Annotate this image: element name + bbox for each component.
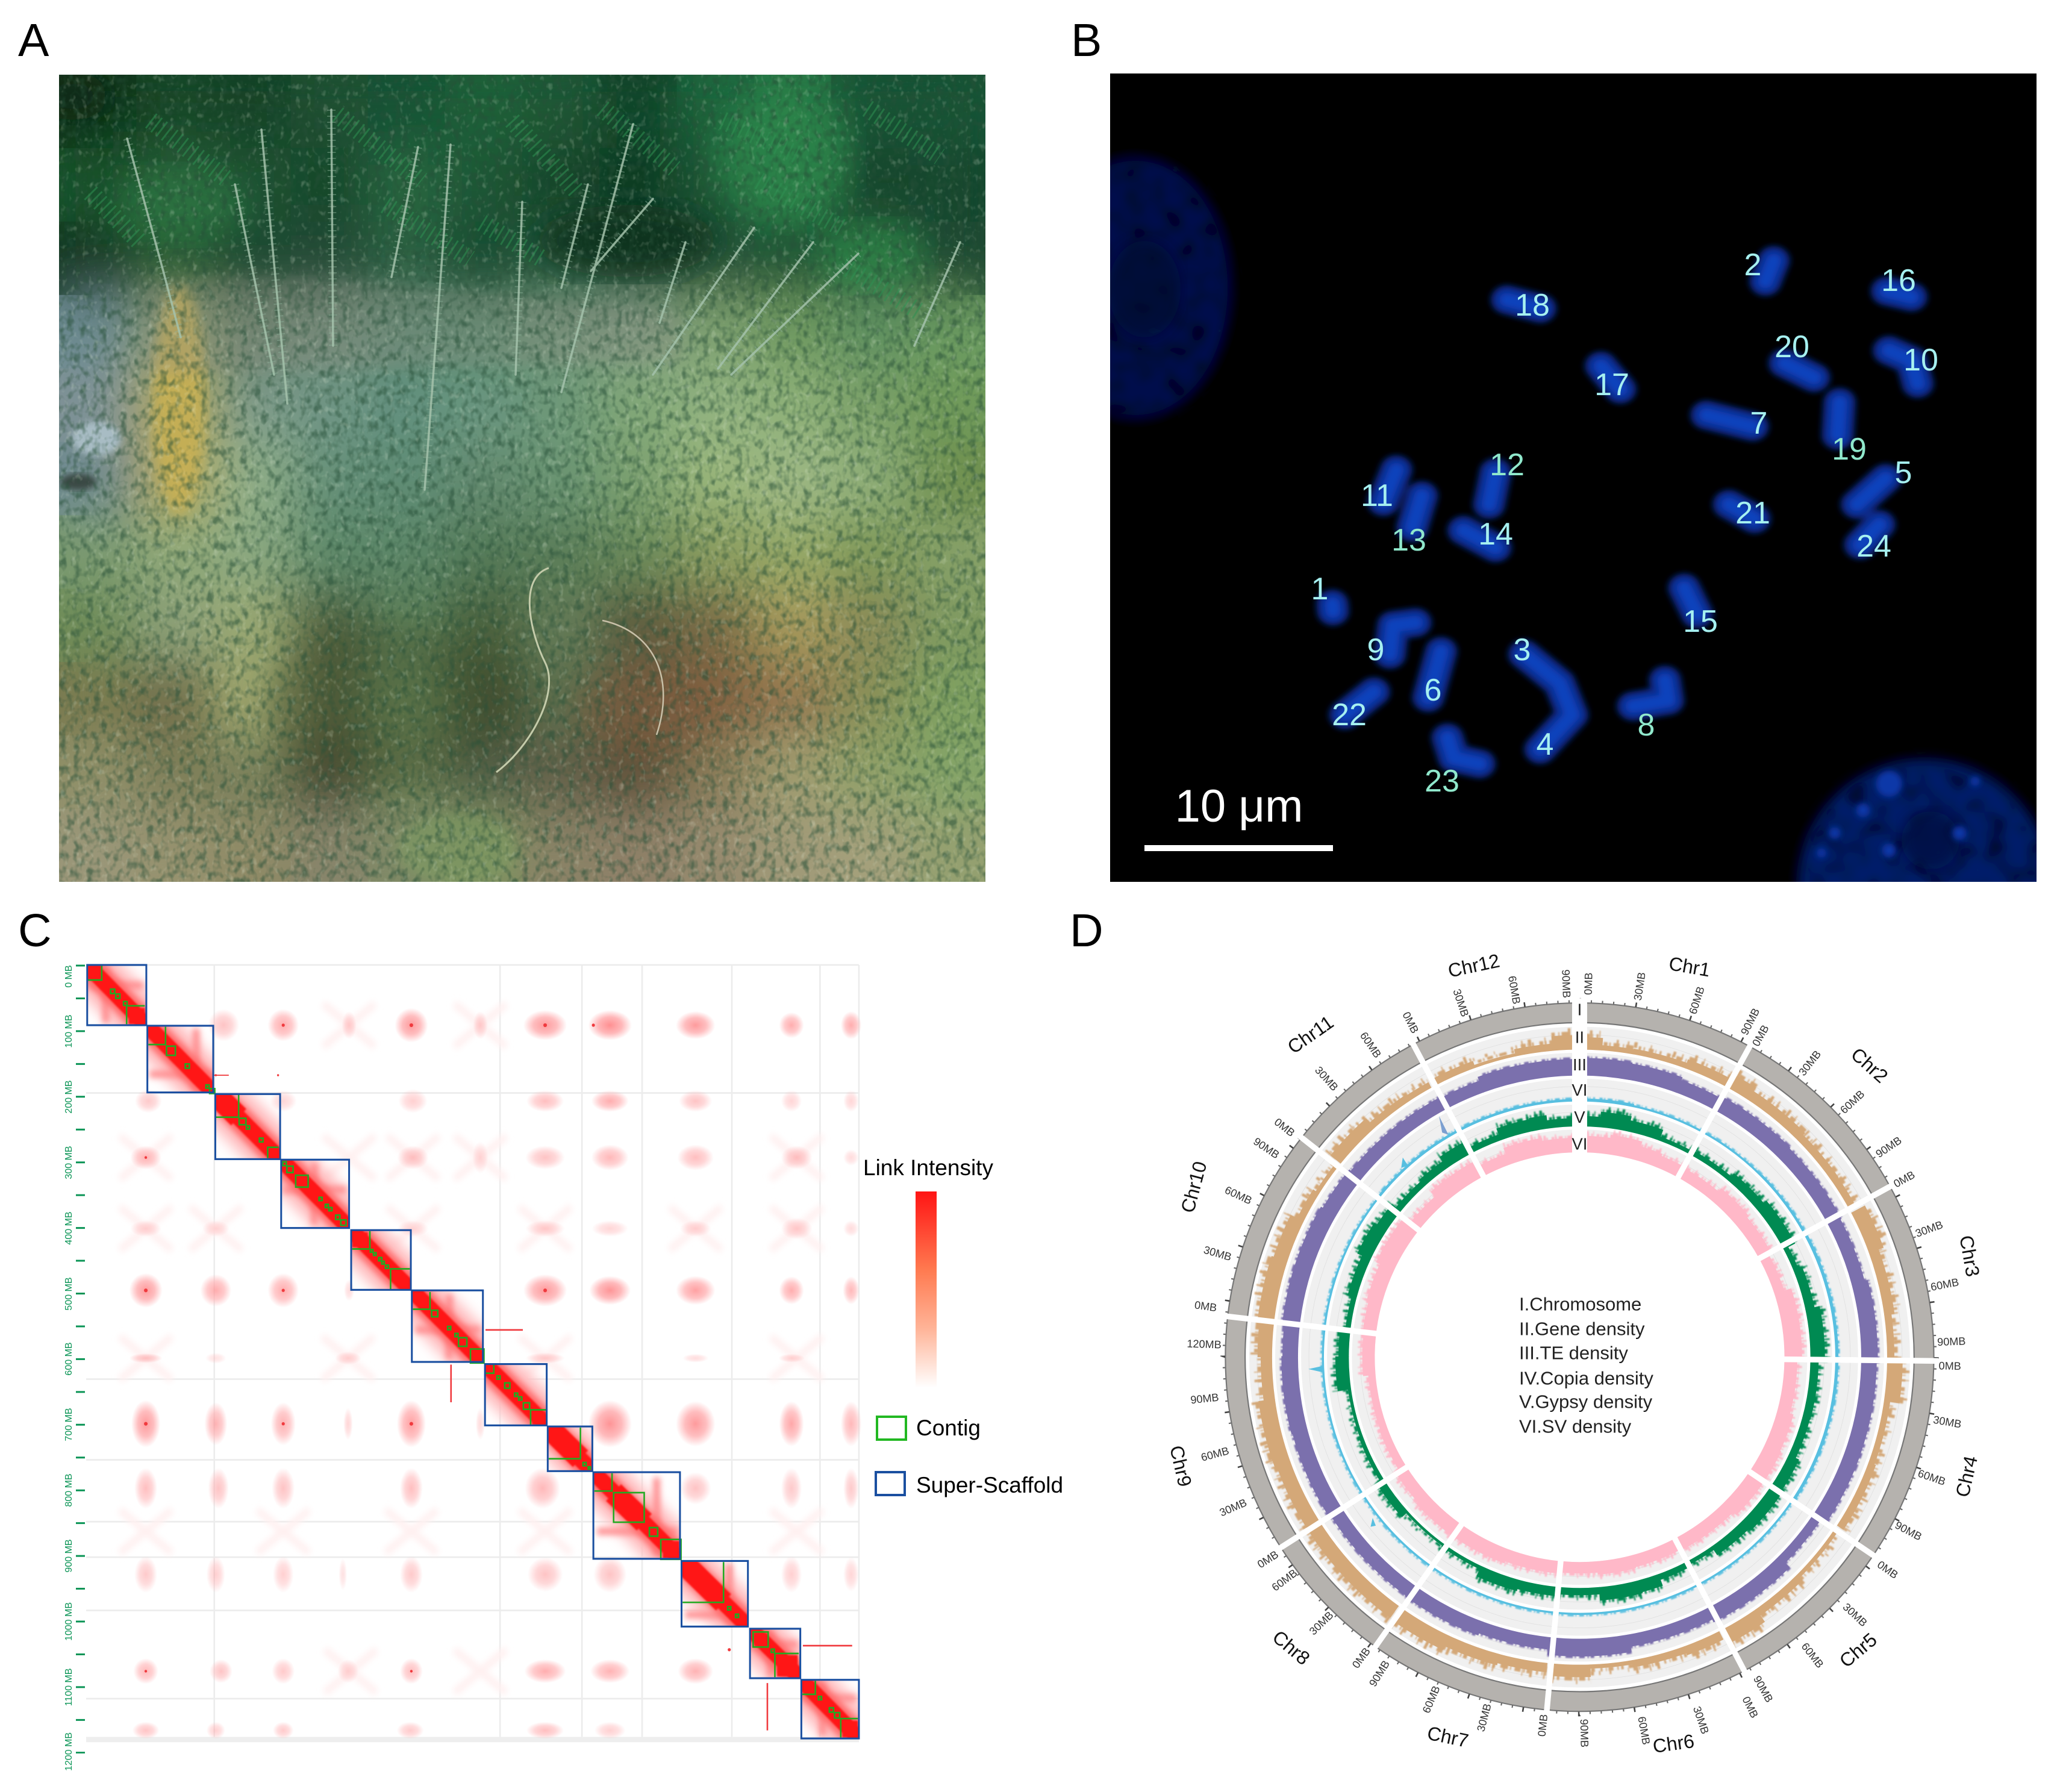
megabase tick labels: 90MB [1251,1135,1282,1161]
panel label C: C [18,905,52,957]
megabase tick labels: 60MB [1420,1684,1443,1715]
megabase tick labels: 90MB [1559,969,1573,998]
panel D: centre track legend: I.Chromosome [1519,1294,1641,1314]
megabase tick labels: 60MB [1270,1567,1299,1594]
chromosome names: Chr12 [1446,949,1502,982]
panel B: chromosome numbers: 22 [1332,698,1367,732]
track roman numerals: III [1573,1055,1587,1074]
panel D: centre track legend: IV.Copia density [1519,1367,1653,1389]
off-diagonal interaction blobs [130,1008,861,1739]
panel B: chromosome numbers: 4 [1537,727,1553,762]
megabase tick labels: 30MB [1932,1414,1962,1431]
super-scaffold boxes [87,965,859,1738]
megabase tick labels: 90MB [1578,1719,1591,1747]
panel D: centre track legend: III.TE density [1519,1342,1628,1364]
megabase tick labels: 60MB [1223,1184,1254,1207]
megabase tick labels: 30MB [1632,972,1648,1001]
megabase tick labels: 90MB [1738,1006,1762,1037]
panel B: chromosome numbers: 8 [1638,708,1655,743]
megabase tick labels [1187,969,1966,1747]
pale halo around the diagonal [87,965,859,1738]
panel B: chromosome numbers: 2 [1744,248,1761,283]
panel B: chromosome numbers: 11 [1361,478,1393,513]
megabase tick labels: 0MB [1938,1360,1961,1372]
panel B: chromosome numbers: 15 [1683,604,1718,639]
megabase tick labels: 90MB [1367,1658,1392,1689]
megabase tick labels: 0MB [1582,972,1595,995]
density spikes [1308,1116,1449,1527]
megabase tick labels: 90MB [1751,1674,1775,1705]
panel B: chromosome numbers: 12 [1490,448,1525,482]
panel B: chromosome numbers: 23 [1425,764,1459,799]
megabase tick labels: 60MB [1358,1030,1384,1060]
panel C: legend contig [877,1416,981,1440]
megabase tick labels: 30MB [1218,1496,1249,1519]
megabase tick labels: 0MB [1750,1023,1771,1048]
panel C: position axis labels [64,965,74,1771]
chromosome names: Chr8 [1269,1626,1314,1669]
megabase tick labels: 30MB [1796,1048,1823,1078]
track backgrounds [1261,1038,1899,1676]
megabase tick labels: 30MB [1914,1219,1944,1240]
panel C: position axis labels: 700 MB [64,1408,74,1441]
chromosome names: Chr4 [1951,1453,1982,1499]
off-diagonal red hot spots and streaks [144,1023,852,1731]
panel B: chromosome numbers: 24 [1856,529,1891,564]
megabase tick labels: 0MB [1535,1714,1550,1737]
megabase tick labels: 30MB [1313,1064,1341,1093]
chromosome ideogram ring [1223,1001,1937,1714]
panel C: position axis labels: 1200 MB [64,1732,74,1771]
panel B: chromosome numbers: 1 [1311,572,1328,607]
panel D: centre track legend: VI.SV density [1519,1416,1632,1437]
diagonal signal clipped to the scaffold boxes [87,965,859,1738]
chromosome arm crosses [89,967,857,1736]
panel C: position axis labels: 400 MB [64,1211,74,1245]
panel B: chromosome numbers: 7 [1750,406,1767,441]
megabase tick labels: 0MB [1891,1169,1917,1190]
track roman numerals: I [1578,1001,1582,1019]
megabase tick labels: 30MB [1307,1609,1336,1637]
chromosome names: Chr7 [1425,1722,1470,1752]
megabase tick labels: 0MB [1194,1299,1217,1314]
panel B: scale bar [1144,781,1333,851]
track roman numerals: VI [1572,1135,1587,1154]
chromosome names: Chr5 [1835,1629,1881,1672]
panel B: chromosome numbers: 5 [1895,455,1912,490]
panel B: scale bar: 10 μm [1175,781,1303,832]
panel C: link intensity title: Link Intensity [863,1155,993,1180]
megabase tick labels: 0MB [1350,1646,1373,1670]
panel D: centre track legend: II.Gene density [1519,1318,1645,1340]
panel C: position axis labels: 1100 MB [64,1669,74,1706]
panel B: chromosome numbers: 17 [1594,367,1629,402]
megabase tick labels: 0MB [1272,1116,1297,1139]
panel label D: D [1070,905,1103,957]
panel C: position axis labels: 300 MB [64,1146,74,1179]
megabase tick labels: 0MB [1400,1010,1421,1035]
megabase tick labels: 60MB [1799,1640,1826,1670]
panel C: legend super-scaffold: Super-Scaffold [916,1473,1063,1497]
panel B: chromosome numbers: 10 [1903,343,1938,378]
panel C: position axis labels: 200 MB [64,1080,74,1114]
panel B: chromosome micrograph background [1110,73,2037,882]
mid-intensity diagonal [87,965,859,1738]
panel B: chromosome numbers: 16 [1881,263,1916,298]
chromosome names: Chr11 [1284,1011,1337,1058]
contig boxes [87,965,858,1737]
panel B: chromosome numbers: 20 [1775,329,1809,364]
panel B: chromosome numbers: 6 [1425,673,1441,708]
panel C: position axis labels: 100 MB [64,1014,74,1048]
megabase tick labels: 30MB [1202,1244,1233,1263]
panel C: position axis labels: 600 MB [64,1342,74,1376]
chromosome names: Chr6 [1652,1730,1696,1757]
panel C: legend contig: Contig [916,1416,981,1440]
panel C: position axis labels: 800 MB [64,1473,74,1507]
megabase tick labels: 30MB [1450,987,1471,1019]
chromosome names: Chr9 [1166,1443,1196,1489]
panel B: interphase nuclei [1110,151,2037,882]
chromosome names: Chr1 [1667,952,1712,981]
megabase tick labels: 120MB [1187,1338,1222,1351]
panel label B: B [1071,14,1102,66]
megabase tick labels: 0MB [1740,1694,1761,1720]
panel B: chromosome numbers: 14 [1478,517,1513,552]
panel B: chromosome numbers: 13 [1391,523,1426,558]
panel D: centre track legend: V.Gypsy density [1519,1391,1653,1412]
heatmap grid lines [86,965,859,1742]
megabase tick labels: 60MB [1635,1716,1652,1746]
megabase tick labels: 60MB [1506,975,1523,1005]
panel D: circular genome plot [1128,906,2031,1792]
megabase tick labels: 60MB [1838,1088,1867,1116]
track roman numerals: II [1575,1028,1584,1046]
panel C: position axis labels: 1000 MB [64,1602,74,1641]
panel C: position axis labels: 900 MB [64,1539,74,1573]
panel label A: A [18,14,49,66]
megabase tick labels: 30MB [1841,1601,1870,1629]
panel B: chromosomes [1332,261,1918,764]
panel B: chromosome numbers: 3 [1514,632,1531,667]
chromosome gaps [1223,998,1938,1714]
panel C: colour bar [916,1191,937,1388]
chromosome names [1166,949,1984,1757]
megabase tick labels: 90MB [1893,1519,1924,1543]
megabase tick labels: 90MB [1190,1391,1219,1406]
strong diagonal signal [87,965,859,1738]
megabase tick labels: 60MB [1200,1444,1231,1464]
megabase tick labels: 0MB [1875,1558,1900,1581]
megabase tick labels: 60MB [1687,985,1707,1016]
track roman numerals [1572,1001,1587,1154]
panel C: position ticks [76,965,85,1753]
megabase tick labels: 90MB [1937,1335,1966,1348]
panel B: chromosome numbers: 9 [1367,632,1384,667]
megabase tick labels: 60MB [1916,1467,1947,1488]
panel C: position axis labels: 500 MB [64,1277,74,1311]
chromosome names: Chr3 [1955,1234,1984,1278]
panel B: chromosome numbers [1311,248,1938,799]
panel C: position axis labels: 0 MB [64,965,74,988]
panel B: chromosome numbers: 21 [1735,496,1770,531]
chromosome names: Chr2 [1847,1043,1892,1087]
megabase tick labels: 0MB [1255,1548,1281,1570]
megabase tick labels: 30MB [1475,1702,1494,1733]
density tracks: gene, TE, Copia, Gypsy, SV [1128,906,2031,1792]
chromosome names: Chr10 [1176,1159,1211,1215]
panel B: chromosome numbers: 19 [1832,432,1867,467]
megabase tick labels: 30MB [1691,1705,1711,1735]
panel A: photograph of the plant [36,72,987,885]
panel C: Hi-C contact heatmap [86,965,861,1742]
megabase tick labels: 60MB [1929,1276,1960,1293]
track roman numerals: V [1574,1108,1585,1126]
track roman numerals: VI [1572,1081,1587,1099]
panel B: chromosome numbers: 18 [1515,288,1550,323]
panel D: centre track legend [1519,1294,1653,1437]
megabase tick labels: 90MB [1873,1134,1904,1160]
faint X-shaped interaction arms [120,1004,823,1693]
